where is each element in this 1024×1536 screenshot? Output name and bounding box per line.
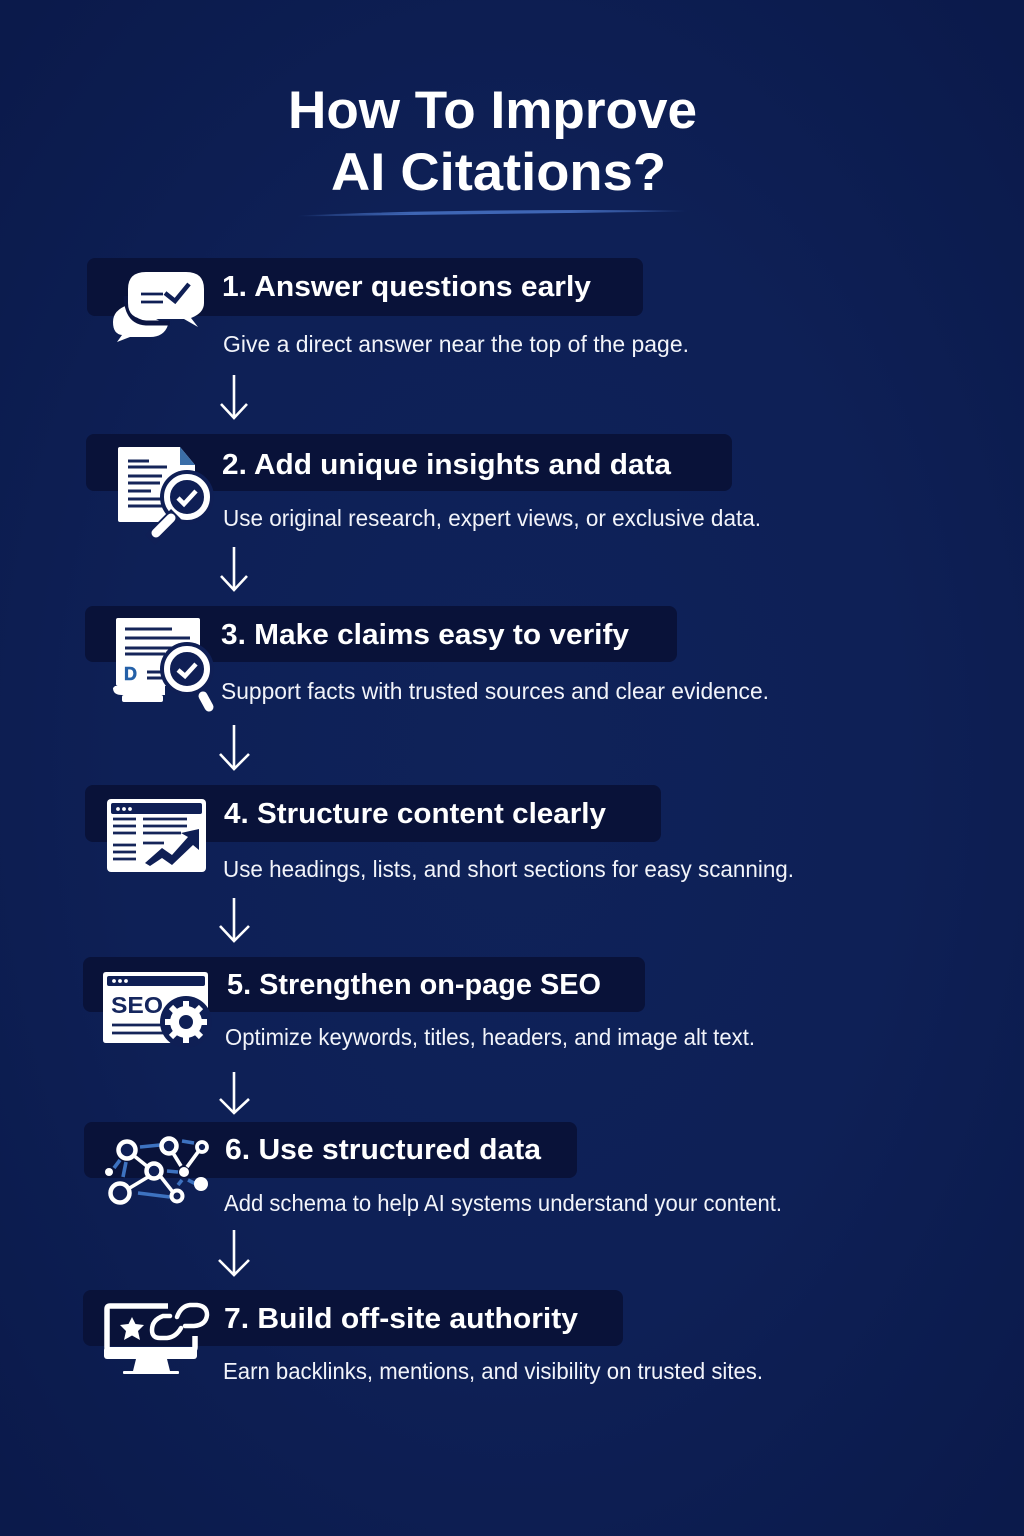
step 7 heading: 7. Build off-site authority: [224, 1303, 578, 1335]
step 3 heading: 3. Make claims easy to verify: [221, 619, 629, 651]
icon: document with magnifier: [118, 447, 214, 540]
heading bar 1: [87, 258, 643, 316]
arrow 6: [219, 1230, 249, 1275]
step 2 description: Use original research, expert views, or exclusive data.: [223, 505, 761, 531]
icon: network graph: [105, 1138, 208, 1202]
heading bar 7: [83, 1290, 623, 1346]
heading bar 4: [85, 785, 661, 842]
step 7: [83, 1290, 763, 1384]
heading bar 2: [86, 434, 732, 491]
step 3: [85, 606, 769, 707]
icon: monitor with star and link: [104, 1305, 207, 1374]
icon: book page with magnifier: D: [124, 664, 137, 684]
icon: SEO window with gear: SEO: [111, 992, 163, 1018]
step 4 heading: 4. Structure content clearly: [224, 798, 606, 830]
step 2: [86, 434, 761, 540]
step 1: [87, 258, 689, 357]
title: AI Citations?: [331, 143, 666, 202]
step 5: [83, 957, 755, 1050]
heading bar 3: [85, 606, 677, 662]
heading bar 5: [83, 957, 645, 1012]
step 6 description: Add schema to help AI systems understand your content.: [224, 1190, 782, 1216]
icon: SEO window with gear: [103, 972, 212, 1048]
icon: chat bubbles with check: [113, 272, 204, 342]
title: How To Improve: [288, 81, 697, 140]
heading bar 6: [84, 1122, 577, 1178]
step 6 heading: 6. Use structured data: [225, 1134, 542, 1166]
step 6: [84, 1122, 782, 1216]
title underline: [298, 211, 688, 216]
arrow 3: [220, 725, 249, 769]
step 7 description: Earn backlinks, mentions, and visibility on trusted sites.: [223, 1358, 763, 1384]
step 3 description: Support facts with trusted sources and clear evidence.: [221, 678, 769, 704]
step 2 heading: 2. Add unique insights and data: [222, 449, 672, 481]
step 5 description: Optimize keywords, titles, headers, and image alt text.: [225, 1024, 755, 1050]
step 5 heading: 5. Strengthen on-page SEO: [227, 969, 601, 1001]
title: [288, 81, 697, 202]
arrow 4: [220, 898, 249, 941]
arrow 1: [221, 375, 247, 418]
arrow 5: [220, 1072, 249, 1113]
arrow 2: [221, 547, 247, 590]
icon: browser window with growth arrow: [107, 799, 206, 872]
step 1 heading: 1. Answer questions early: [222, 271, 591, 303]
step 1 description: Give a direct answer near the top of the page.: [223, 331, 689, 357]
step 4: [85, 785, 794, 882]
step 4 description: Use headings, lists, and short sections for easy scanning.: [223, 856, 794, 882]
icon: book page with magnifier: [113, 618, 214, 707]
